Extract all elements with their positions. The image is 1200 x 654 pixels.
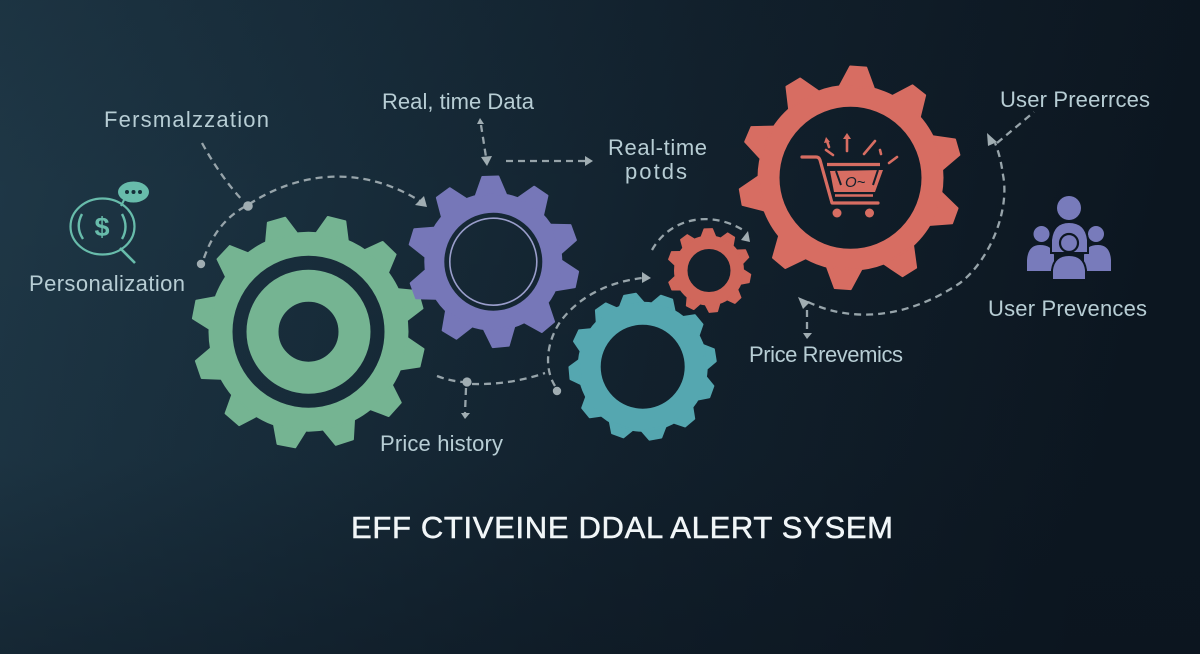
icon: dollar magnifier with speech bubble (70, 182, 149, 263)
icon: shopping cart with price arrows: O~ (845, 174, 866, 191)
label: Price history: Price history (380, 431, 503, 456)
gear: large green (192, 215, 425, 449)
gear: teal (569, 293, 717, 441)
label: Real-time potds (608, 135, 707, 184)
connector: top left arc with arrow into purple gear (197, 143, 427, 268)
label: Price Rrevemics: Price Rrevemics (749, 342, 903, 367)
connector: right sweep to price revemics and user preferences (798, 112, 1034, 339)
label: Fersmalzzation: Fersmalzzation (104, 107, 269, 132)
gear: large red (738, 66, 962, 290)
label: Personalization: Personalization (29, 271, 185, 296)
connector: real time data arrows (477, 118, 593, 166)
label: Real-time potds: Real-time (608, 135, 707, 160)
label: Real-time potds: potds (625, 159, 687, 184)
label: User Prevences: User Prevences (988, 296, 1147, 321)
label: User Preerrces: User Preerrces (1000, 87, 1150, 112)
gear: purple (408, 176, 580, 348)
connector: price history path and arrows (437, 219, 750, 419)
gear: small red (668, 229, 751, 313)
icon: shopping cart with price arrows (802, 133, 897, 218)
title: EFF CTIVEINE DDAL ALERT SYSEM (351, 510, 893, 545)
icon: dollar magnifier with speech bubble: $ (94, 212, 110, 242)
icon: user group (1027, 196, 1111, 280)
label: Real, time Data: Real, time Data (382, 89, 535, 114)
